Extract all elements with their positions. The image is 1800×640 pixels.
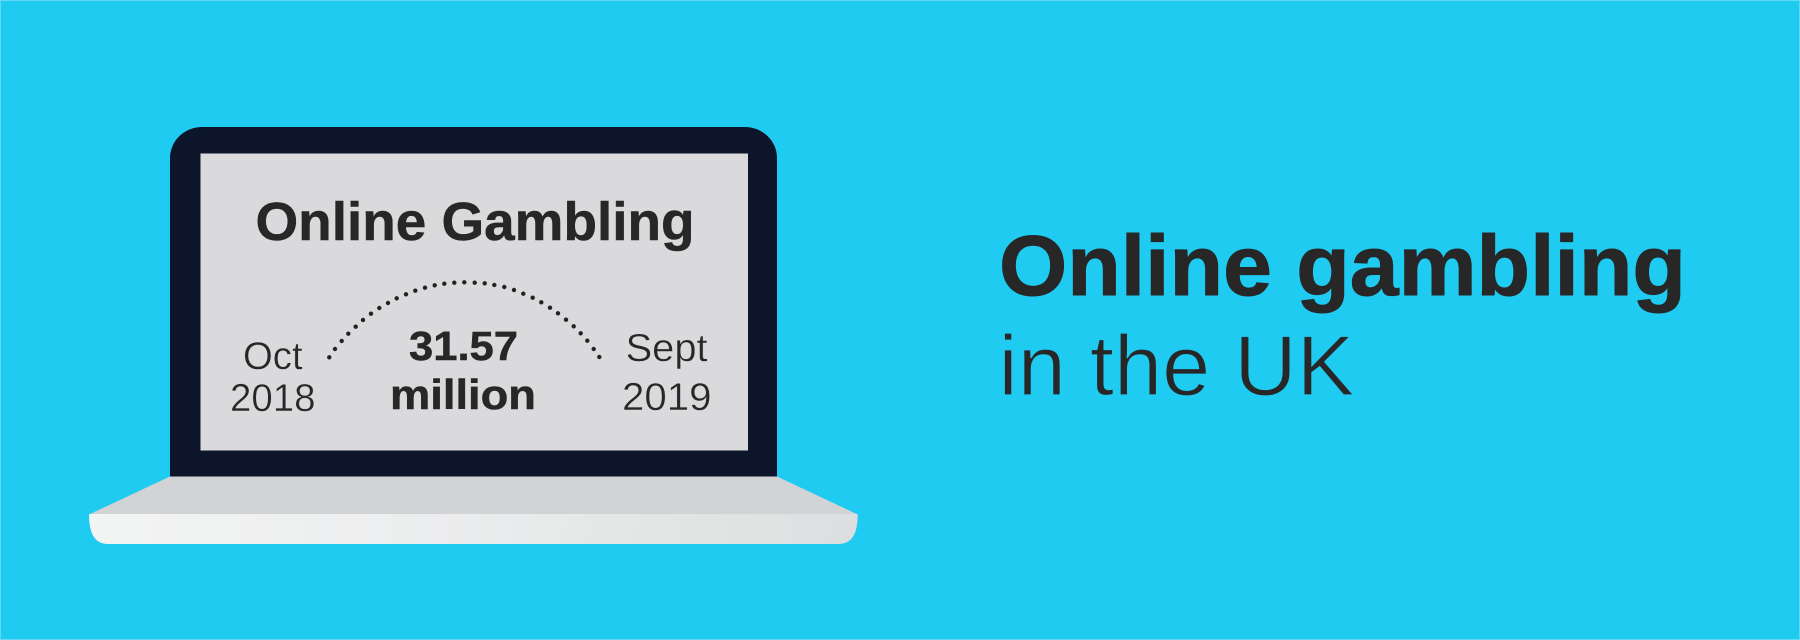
- title: light line: in the UK: [998, 319, 1354, 414]
- statistic: 31.57 million: million: [390, 371, 536, 418]
- title: [998, 219, 1686, 414]
- start date label: [230, 335, 316, 420]
- end date label: [622, 327, 712, 419]
- laptop screen: [200, 154, 748, 450]
- laptop lid: [170, 127, 777, 477]
- illustration: laptop: [89, 127, 858, 544]
- dotted arc: [327, 280, 602, 359]
- title: bold line: Online gambling: [999, 219, 1686, 314]
- start date label: 2018: [230, 377, 316, 420]
- laptop keyboard deck: [89, 476, 858, 514]
- laptop front edge: [89, 514, 858, 544]
- end date label: 2019: [622, 376, 712, 419]
- start date label: Oct: [243, 335, 303, 378]
- screen heading: Online Gambling: [256, 192, 694, 252]
- statistic: 31.57 million: [390, 323, 536, 418]
- end date label: Sept: [626, 327, 708, 370]
- statistic: 31.57 million: 31.57: [409, 323, 518, 369]
